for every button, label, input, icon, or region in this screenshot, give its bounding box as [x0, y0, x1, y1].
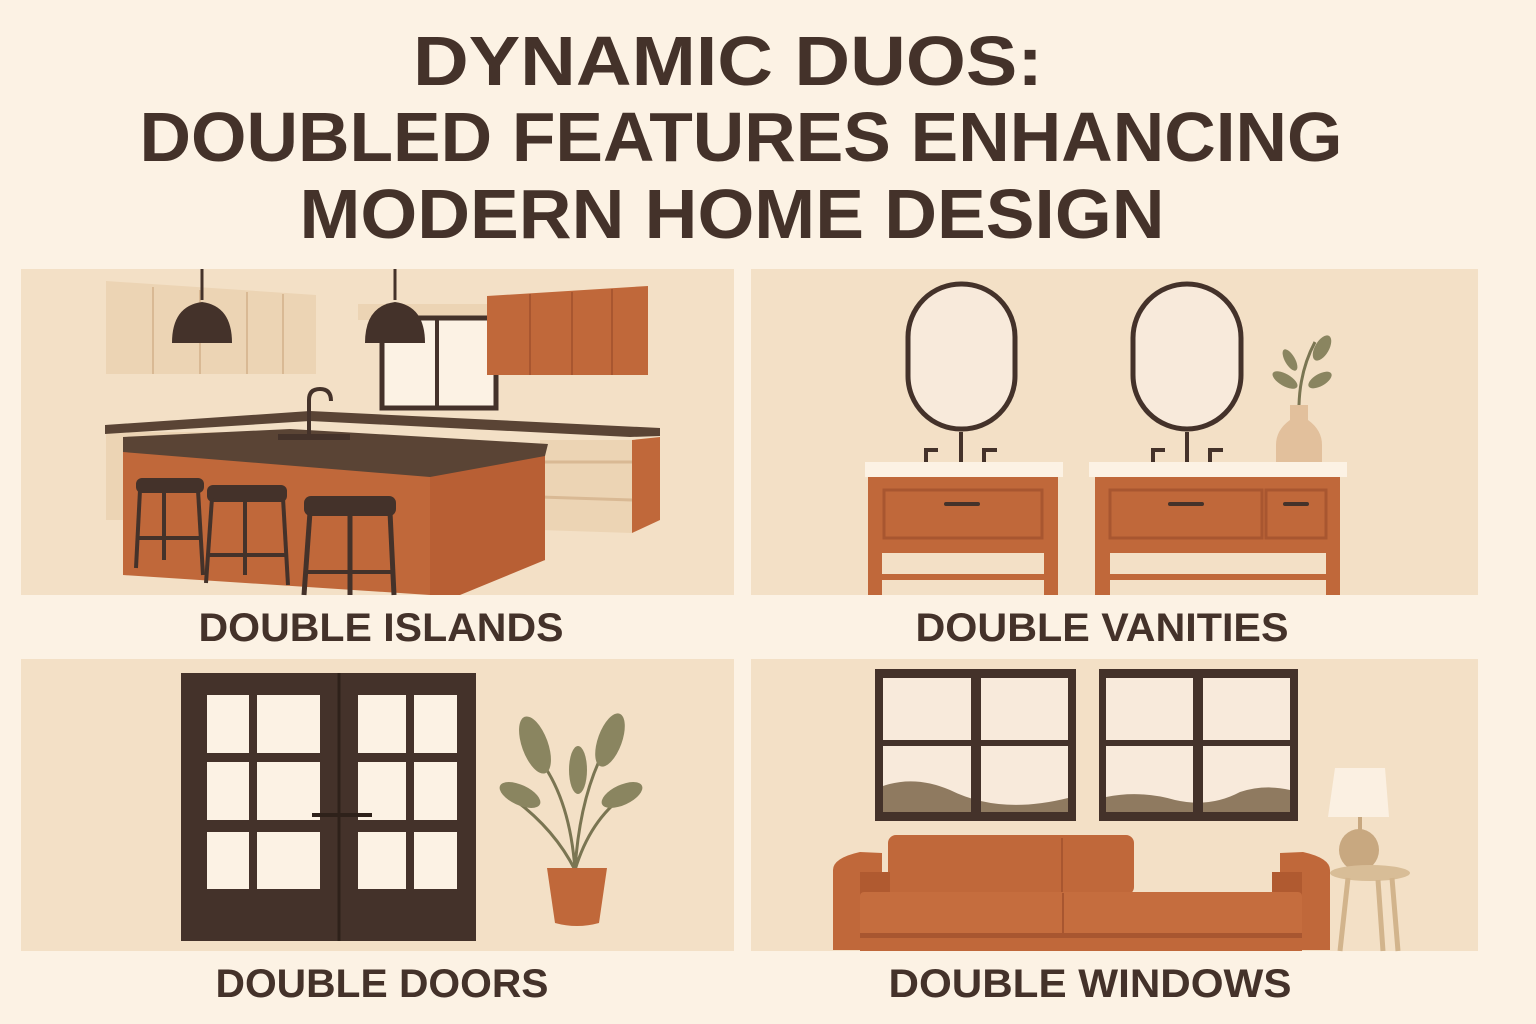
back counter: [105, 411, 660, 533]
panel: double doors: [21, 659, 734, 951]
upper cabinets left: [106, 281, 316, 374]
label: double doors: DOUBLE DOORS: [216, 962, 548, 1006]
upper cabinets orange: [487, 286, 648, 375]
plant: [496, 710, 646, 926]
title: DYNAMIC DUOS:: [413, 22, 1043, 100]
doors: [181, 673, 476, 941]
stools: [136, 478, 396, 595]
sofa: [833, 835, 1330, 951]
window: [358, 304, 496, 408]
island: [123, 389, 548, 595]
vanities: [865, 462, 1347, 595]
title: MODERN HOME DESIGN: [300, 175, 1164, 253]
mirrors: [908, 284, 1241, 429]
label: double islands: DOUBLE ISLANDS: [198, 606, 564, 650]
panel: double vanities: [751, 269, 1478, 595]
label: double vanities: DOUBLE VANITIES: [916, 606, 1288, 650]
title: [140, 22, 1343, 253]
lamp and side table: [1328, 768, 1410, 951]
title: DOUBLED FEATURES ENHANCING: [140, 98, 1343, 176]
pendant lamps: [172, 269, 425, 343]
plant vase: [1270, 332, 1335, 463]
windows: [875, 669, 1298, 821]
label: double windows: DOUBLE WINDOWS: [888, 962, 1292, 1006]
panel: double windows: [751, 659, 1478, 951]
faucets: [926, 432, 1223, 462]
panel: double islands: [21, 269, 734, 595]
